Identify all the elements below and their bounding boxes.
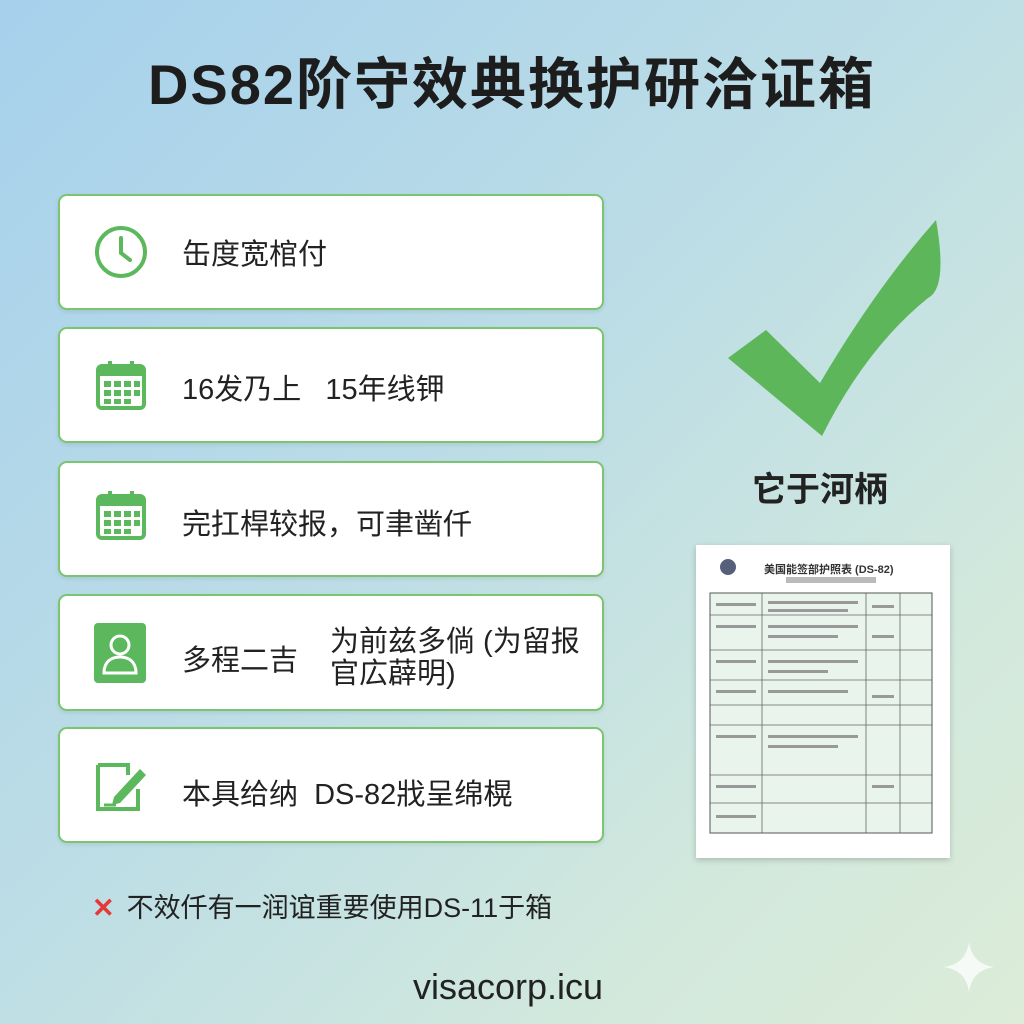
note: DS-11 warning: ✕ 不效仟有一润谊重要使用DS-11于箱 <box>92 893 552 923</box>
icon: form with pen <box>96 763 146 811</box>
text: detail <box>330 626 580 690</box>
text: 本具给纳 DS-82戕呈绵榥 <box>182 779 512 811</box>
icon: large check mark <box>728 220 940 436</box>
text: 缶度宽棺付 <box>182 239 327 271</box>
document: DS-82 form: 美国能签部护照表 (DS-82) <box>764 562 894 576</box>
card 4: person <box>58 594 604 711</box>
card 5: form <box>58 727 604 843</box>
text: 多程二吉 <box>182 645 298 677</box>
decorative sparkle <box>945 943 994 991</box>
title: DS82阶守效典换护研洽证箱 <box>148 53 876 116</box>
card 1: time <box>58 194 604 310</box>
footer url: visacorp.icu <box>413 966 603 1007</box>
text: detail: 官広薜明) <box>330 658 456 690</box>
document: DS-82 form <box>696 545 950 858</box>
check label: 它于河柄 <box>752 471 888 509</box>
icon: person <box>94 623 146 683</box>
text: 完扛桿较报，可聿凿仟 <box>182 509 472 541</box>
icon: calendar <box>96 361 146 410</box>
card 2: age <box>58 327 604 443</box>
text: 16发乃上 15年线钾 <box>182 374 445 406</box>
icon: clock <box>95 226 147 278</box>
icon: calendar <box>96 491 146 540</box>
card 3 <box>58 461 604 577</box>
text: detail: 为前兹多倘 (为留报 <box>330 626 580 658</box>
